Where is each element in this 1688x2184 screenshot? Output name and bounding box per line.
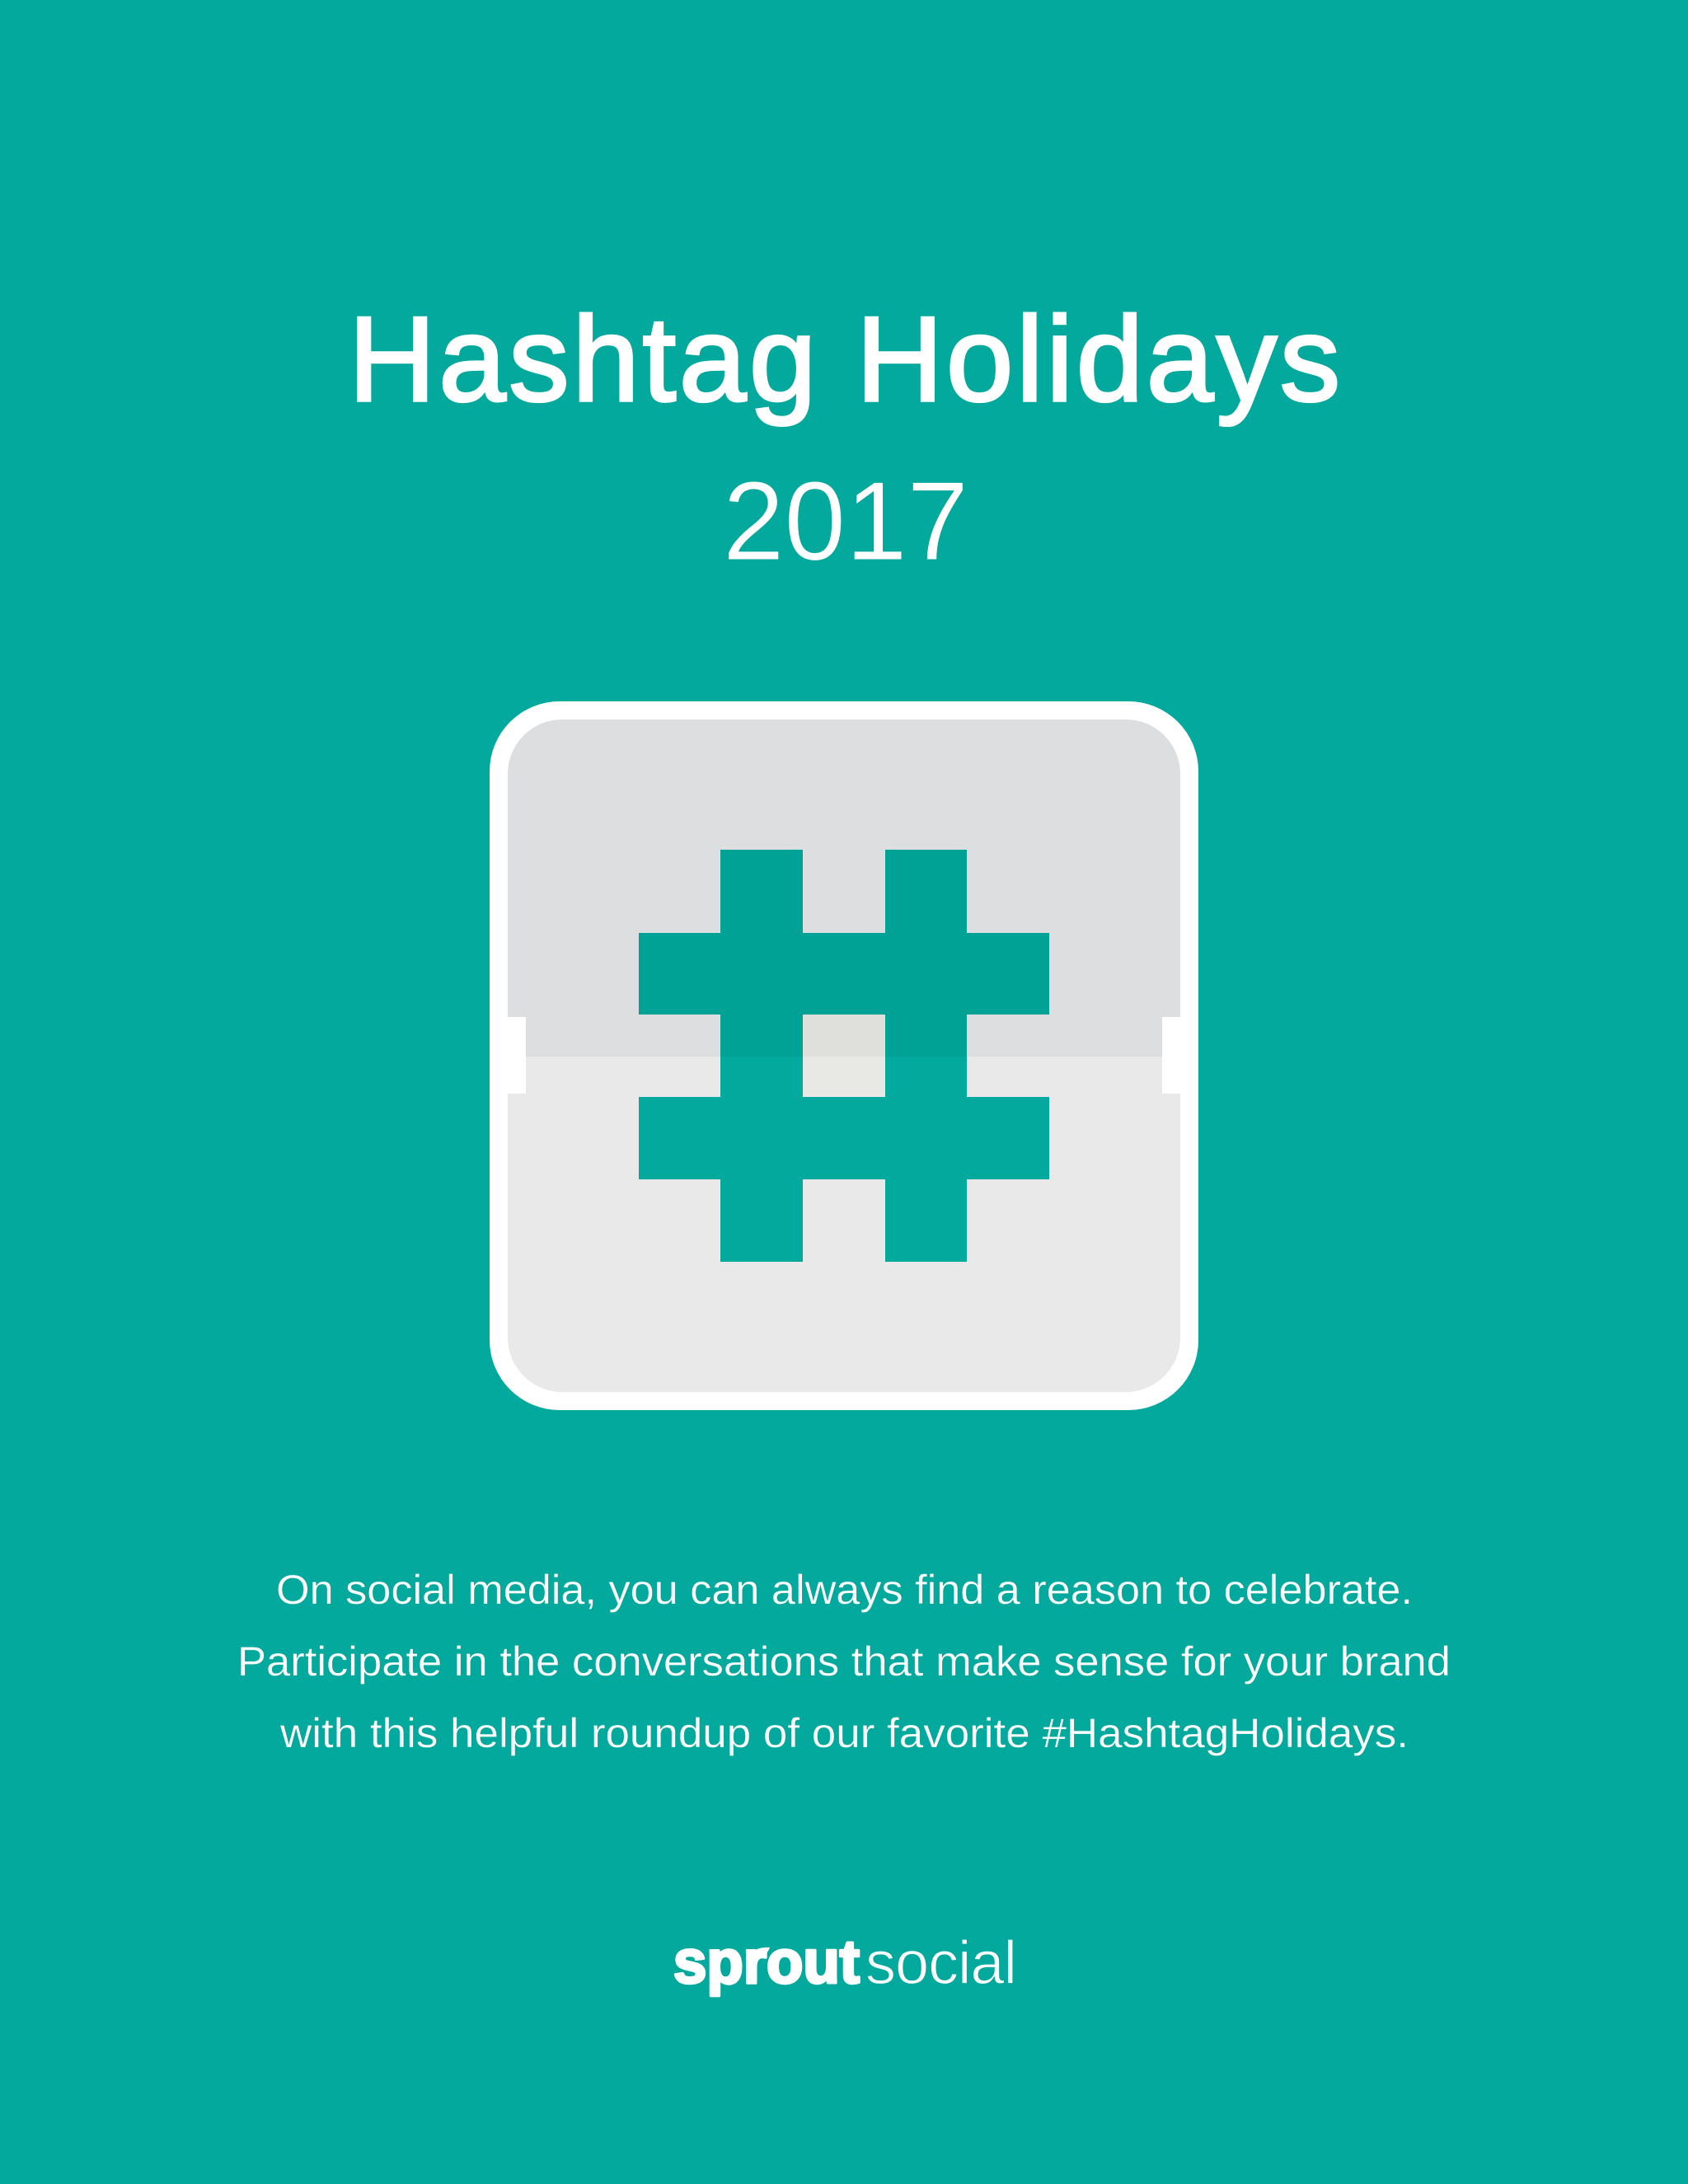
- infographic cover: [241, 312, 1448, 1998]
- intro paragraph: On social media, you can always find a reason to celebrate.: [276, 1567, 1413, 1613]
- icon: hashtag flip calendar: [490, 701, 1198, 1410]
- title: Hashtag Holidays: [349, 292, 1340, 426]
- intro paragraph: with this helpful roundup of our favorite #HashtagHolidays.: [279, 1710, 1409, 1756]
- left hinge: [508, 1017, 526, 1094]
- logo: sprout social: [673, 1928, 1017, 1997]
- logo: sprout social: social: [865, 1929, 1017, 1997]
- icon frame: [490, 701, 1198, 1410]
- hash symbol: [639, 850, 1049, 1262]
- logo: sprout social: sprout: [673, 1928, 860, 1996]
- intro paragraph: Participate in the conversations that make sense for your brand: [237, 1638, 1451, 1685]
- year heading: 2017: [723, 458, 968, 583]
- right hinge: [1162, 1017, 1180, 1094]
- calendar faces: [508, 719, 1180, 1392]
- intro paragraph: [237, 1567, 1451, 1756]
